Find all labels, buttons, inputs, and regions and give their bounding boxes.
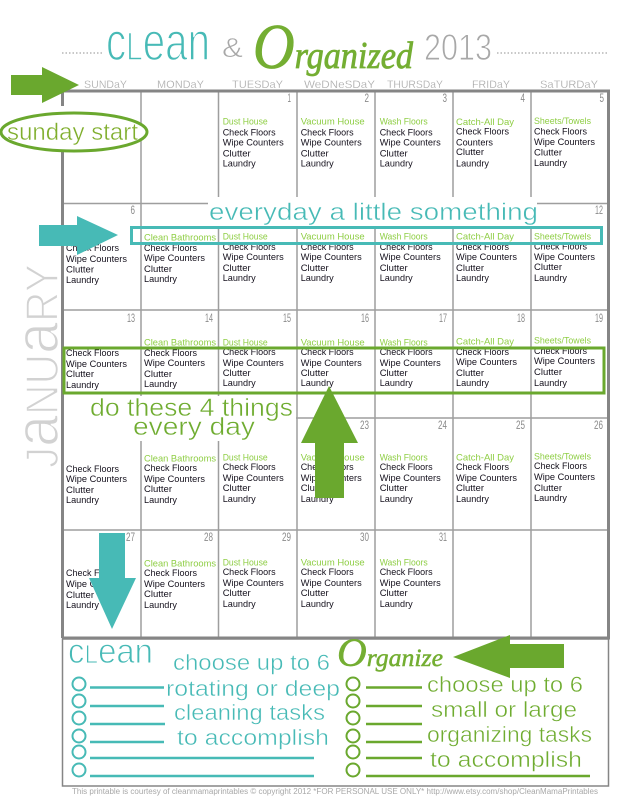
week 3 tasks: Sheets/Towels (534, 336, 591, 346)
week 5 tasks: Check Floors (144, 568, 197, 579)
week 1 tasks: Laundry (534, 158, 567, 169)
week 2 tasks: Sheets/Towels (534, 232, 591, 242)
weekday headers: SUNDaY (84, 79, 128, 91)
week 2 tasks: Clutter (144, 264, 172, 275)
week 1 tasks: Clutter (380, 148, 408, 160)
week 5 tasks: Clutter (301, 588, 329, 599)
clean instructions (166, 650, 340, 750)
week 1 tasks: Wipe Counters (223, 138, 284, 148)
week 4 tasks: Wipe Counters (144, 474, 205, 485)
week 5 tasks: Laundry (223, 599, 256, 610)
date numbers: 19 (595, 311, 603, 325)
week 4 tasks: Clutter (223, 483, 251, 494)
organize instructions: to accomplish (430, 747, 582, 772)
week 5 tasks: Wipe Counters (66, 579, 127, 590)
weekday headers: WeDNeSDaY (304, 79, 376, 91)
date numbers: 6 (130, 203, 135, 217)
week 4 tasks: Wipe Counters (534, 472, 595, 483)
week 4 tasks: Vacuum House (301, 452, 365, 464)
week 5 tasks: Check Floors (380, 567, 433, 578)
week 1 tasks: Wipe Counters (301, 138, 362, 148)
date numbers: 27 (126, 530, 135, 544)
date numbers: 18 (517, 311, 525, 325)
week 4 tasks: Check Floors (66, 464, 119, 475)
clean instructions: to accomplish (177, 725, 329, 750)
organize instructions: small or large (431, 697, 577, 722)
clean heading: cLean (68, 632, 153, 671)
week 1 tasks: Laundry (456, 158, 489, 170)
week 1 tasks: Clutter (534, 148, 562, 158)
callout: do these 4 things every day: every day (133, 413, 256, 441)
weekday headers: MONDaY (157, 79, 205, 91)
date numbers (126, 91, 604, 544)
footer credit: This printable is courtesy of cleanmamaprintables © copyright 2012 *FOR PERSONAL USE ONLY* http://www.etsy.com/shop/CleanMamaPrintables (72, 787, 598, 796)
week 4 tasks: Sheets/Towels (534, 452, 591, 462)
week 2 tasks: Laundry (66, 275, 99, 286)
week 4 tasks: Clutter (144, 484, 172, 495)
week 1 tasks: Wipe Counters (380, 138, 441, 148)
week 1 tasks: Check Floors (456, 126, 509, 138)
clean instructions: choose up to 6 (173, 650, 330, 675)
week 5 tasks: Clutter (380, 588, 408, 599)
organize instructions: organizing tasks (427, 722, 592, 747)
week 5 tasks: Wipe Counters (144, 579, 205, 590)
week 3 tasks: Check Floors (301, 347, 354, 358)
highlight box: four daily tasks (64, 348, 604, 393)
date numbers: 26 (594, 418, 603, 432)
week 5 tasks: Wash Floors (380, 558, 428, 568)
week 5 tasks: Wipe Counters (223, 578, 284, 589)
week 3 tasks: Clutter (380, 368, 408, 379)
week 2 tasks: Dust House (223, 232, 268, 242)
week 3 tasks: Dust House (223, 338, 268, 348)
date numbers: 12 (595, 203, 603, 217)
weekday headers: TUESDaY (232, 79, 284, 91)
date numbers: 17 (439, 311, 447, 325)
week 3 tasks: Laundry (223, 378, 256, 389)
arrow: green pointing up (301, 386, 358, 498)
week 3 tasks: Check Floors (66, 348, 119, 359)
panel: bottom goals box (62, 639, 608, 786)
week 3 tasks: Wipe Counters (144, 358, 205, 369)
date numbers: 13 (127, 311, 135, 325)
week 5 tasks: Check Floors (223, 567, 276, 578)
week 3 tasks: Vacuum House (301, 338, 365, 348)
weekday headers: THURSDaY (387, 79, 444, 91)
calendar grid (62, 91, 610, 638)
week 3 tasks: Clutter (301, 368, 329, 379)
week 4 tasks: Wipe Counters (223, 473, 284, 484)
week 3 tasks: Clutter (534, 367, 562, 378)
week 2 tasks: Vacuum House (301, 232, 365, 242)
week 3 tasks: Check Floors (456, 347, 509, 358)
week 2 tasks: Clutter (534, 262, 562, 273)
week 4 tasks: Laundry (223, 494, 256, 505)
week 5 tasks: Wipe Counters (380, 578, 441, 589)
week 3 tasks: Laundry (66, 380, 99, 391)
week 3 tasks: Clutter (223, 368, 251, 379)
week 4 tasks: Check Floors (223, 462, 276, 473)
week 2 tasks: Wipe Counters (66, 254, 127, 265)
organize checklist lines (366, 688, 590, 776)
week 1 tasks: Laundry (223, 158, 256, 170)
week 4 tasks: Check Floors (380, 462, 433, 473)
week 2 tasks: Check Floors (301, 242, 354, 253)
highlight box: everyday row (132, 228, 602, 244)
week 1 tasks: Vacuum House (301, 116, 365, 128)
date numbers: 25 (516, 418, 525, 432)
week 4 tasks: Wipe Counters (301, 473, 362, 484)
clean instructions: cleaning tasks (174, 700, 325, 725)
callout: sunday start (1, 113, 147, 151)
week 2 tasks: Clutter (456, 263, 484, 274)
week 3 tasks: Wipe Counters (223, 358, 284, 369)
week 3 tasks: Check Floors (144, 348, 197, 359)
week 1 tasks: Clutter (456, 147, 484, 158)
date numbers: 2 (364, 91, 369, 105)
week 5 tasks: Clutter (144, 589, 172, 600)
week 3 tasks: Clutter (66, 369, 94, 380)
week 1 tasks: Wash Floors (380, 116, 428, 128)
date numbers: 29 (282, 530, 291, 544)
week 1 tasks: Check Floors (223, 128, 276, 138)
callout: do these 4 things every day (90, 394, 293, 441)
week 2 tasks: Laundry (144, 274, 177, 285)
week 4 tasks: Wipe Counters (456, 473, 517, 484)
organize instructions (427, 672, 592, 772)
week 1 tasks: Catch-All Day (456, 117, 514, 128)
week 5 tasks: Check Floors (301, 567, 354, 578)
date numbers: 1 (288, 91, 291, 105)
week 2 tasks: Catch-All Day (456, 232, 514, 242)
week 2 tasks: Check Floors (144, 243, 197, 254)
week 5 tasks: Clutter (66, 590, 94, 601)
weekday headers: FRIDaY (472, 79, 511, 91)
date numbers: 5 (600, 91, 604, 105)
week 1 tasks: Laundry (301, 158, 334, 170)
panel: clean goals (68, 632, 340, 776)
week 4 tasks: Wash Floors (380, 452, 428, 464)
arrow: green pointing left to Organize (453, 635, 564, 678)
week 1 tasks: Counters (456, 138, 493, 148)
week 4 tasks: Check Floors (534, 461, 587, 472)
arrow: green pointing to Sunday (11, 67, 79, 103)
week 5 tasks: Vacuum House (301, 558, 365, 568)
week 3 tasks: Clutter (144, 369, 172, 380)
week 2 tasks: Laundry (380, 273, 413, 284)
week 4 tasks: Laundry (534, 493, 567, 504)
week 1 tasks: Dust House (223, 116, 268, 128)
week 3 tasks: Check Floors (380, 347, 433, 358)
week 5 tasks: Clutter (223, 588, 251, 599)
week 4 tasks: Catch-All Day (456, 452, 514, 464)
week 4 tasks: Clutter (301, 483, 329, 494)
week 4 tasks: Laundry (66, 495, 99, 506)
weekday headers: SaTURDaY (540, 79, 599, 91)
week 2 tasks: Wipe Counters (144, 253, 205, 264)
week 2 tasks: Clutter (380, 263, 408, 274)
week 3 tasks: Wipe Counters (301, 358, 362, 369)
title: & (222, 32, 243, 63)
white masks behind overlaid annotations (60, 106, 537, 441)
week 1 tasks: Sheets/Towels (534, 116, 591, 127)
week 2 tasks: Check Floors (380, 242, 433, 253)
date numbers: 3 (442, 91, 447, 105)
week 4 tasks: Clutter (66, 485, 94, 496)
week 2 tasks: Clutter (301, 263, 329, 274)
week 2 tasks: Clutter (223, 263, 251, 274)
week 3 tasks: Clean Bathrooms (144, 338, 216, 348)
week 4 tasks: Clutter (534, 483, 562, 494)
week 5 tasks: Check Floors (66, 568, 119, 579)
week 1 tasks: Check Floors (301, 128, 354, 138)
week 1 tasks: Wipe Counters (534, 137, 595, 148)
week 4 tasks: Laundry (301, 494, 334, 505)
week 2 tasks: Wipe Counters (301, 252, 362, 263)
week 2 tasks: Wipe Counters (534, 252, 595, 263)
week 3 tasks: Laundry (144, 379, 177, 390)
title: Organized (253, 11, 414, 82)
week 5 tasks: Wipe Counters (301, 578, 362, 589)
week 3 tasks: Check Floors (534, 346, 587, 357)
week 4 tasks: Clutter (380, 483, 408, 494)
week 3 tasks: Clutter (456, 368, 484, 379)
week 4 tasks: Laundry (456, 494, 489, 505)
organize instructions: choose up to 6 (427, 672, 583, 697)
arrow: teal pointing right to highlighted row (39, 216, 118, 255)
week 3 tasks: Laundry (301, 378, 334, 389)
title: cLean (106, 12, 210, 72)
clean checklist lines (90, 688, 314, 776)
date numbers: 4 (520, 91, 525, 105)
week 2 tasks: Laundry (301, 273, 334, 284)
week 5 tasks: Dust House (223, 558, 268, 568)
date numbers: 24 (438, 418, 447, 432)
week 1 tasks: Check Floors (380, 128, 433, 138)
week 2 tasks: Check Floors (66, 243, 119, 254)
week 2 tasks: Wipe Counters (380, 252, 441, 263)
week 3 tasks: Laundry (534, 378, 567, 389)
date numbers: 15 (283, 311, 291, 325)
week 4 tasks: Laundry (380, 494, 413, 505)
week 5 tasks: Laundry (301, 599, 334, 610)
date numbers: 30 (360, 530, 369, 544)
week 4 tasks: Clean Bathrooms (144, 454, 216, 464)
week 3 tasks: Wash Floors (380, 338, 428, 348)
week 3 tasks (66, 336, 595, 391)
week 4 tasks: Dust House (223, 452, 268, 464)
week 4 tasks: Check Floors (301, 462, 354, 473)
week 2 tasks: Clutter (66, 264, 94, 276)
weekday headers (84, 79, 599, 91)
date numbers: 28 (204, 530, 213, 544)
week 2 tasks: Wipe Counters (456, 252, 517, 263)
week 1 tasks: Clutter (301, 148, 329, 160)
week 2 tasks: Laundry (456, 273, 489, 284)
week 1 tasks: Clutter (223, 148, 251, 160)
week 3 tasks: Wipe Counters (534, 356, 595, 367)
week 1 tasks: Check Floors (534, 126, 587, 138)
week 5 tasks: Laundry (380, 599, 413, 610)
callout: do these 4 things every day: do these 4 things (90, 394, 293, 422)
week 2 tasks: Check Floors (534, 242, 587, 252)
date numbers: 31 (439, 530, 447, 544)
clean checklist circles (72, 678, 86, 776)
week 2 tasks: Check Floors (456, 242, 509, 253)
week 2 tasks: Laundry (534, 273, 567, 284)
week 4 tasks: Check Floors (456, 462, 509, 473)
week 4 tasks: Laundry (144, 495, 177, 506)
clean instructions: rotating or deep (166, 676, 340, 701)
week 4 tasks: Clutter (456, 483, 484, 494)
week 5 tasks: Laundry (66, 600, 99, 611)
date numbers: 16 (361, 311, 369, 325)
week 4 tasks: Check Floors (144, 463, 197, 474)
month label: January: JaNUaRY (3, 264, 72, 468)
panel: organize goals (337, 630, 592, 776)
organize checklist circles (346, 678, 360, 776)
callout: everyday a little something: everyday a little something (209, 199, 538, 226)
title (62, 11, 608, 82)
week 5 tasks (66, 558, 441, 611)
week 2 tasks: Wash Floors (380, 232, 428, 242)
organize heading: Organize (337, 630, 443, 675)
week 3 tasks: Wipe Counters (66, 359, 127, 370)
week 2 tasks: Laundry (223, 273, 256, 284)
week 3 tasks: Check Floors (223, 347, 276, 358)
week 2 tasks: Clean Bathrooms (144, 232, 216, 244)
date numbers: 23 (360, 418, 369, 432)
week 2 tasks (66, 232, 595, 286)
week 2 tasks: Wipe Counters (223, 252, 284, 263)
week 3 tasks: Wipe Counters (456, 357, 517, 368)
week 4 tasks: Wipe Counters (380, 473, 441, 484)
week 5 tasks: Clean Bathrooms (144, 558, 216, 570)
week 3 tasks: Wipe Counters (380, 358, 441, 369)
week 1 tasks: Laundry (380, 158, 413, 170)
week 3 tasks: Catch-All Day (456, 336, 514, 348)
callout: sunday start: sunday start (7, 119, 138, 146)
arrow: teal pointing down (89, 533, 136, 629)
week 3 tasks: Laundry (380, 378, 413, 389)
week 5 tasks: Laundry (144, 600, 177, 611)
date numbers: 14 (205, 311, 213, 325)
week 2 tasks: Check Floors (223, 242, 276, 253)
week 1 tasks (223, 116, 595, 170)
week 4 tasks: Wipe Counters (66, 474, 127, 485)
week 4 tasks (66, 452, 595, 506)
title: 2013 (424, 27, 492, 68)
week 3 tasks: Laundry (456, 378, 489, 389)
